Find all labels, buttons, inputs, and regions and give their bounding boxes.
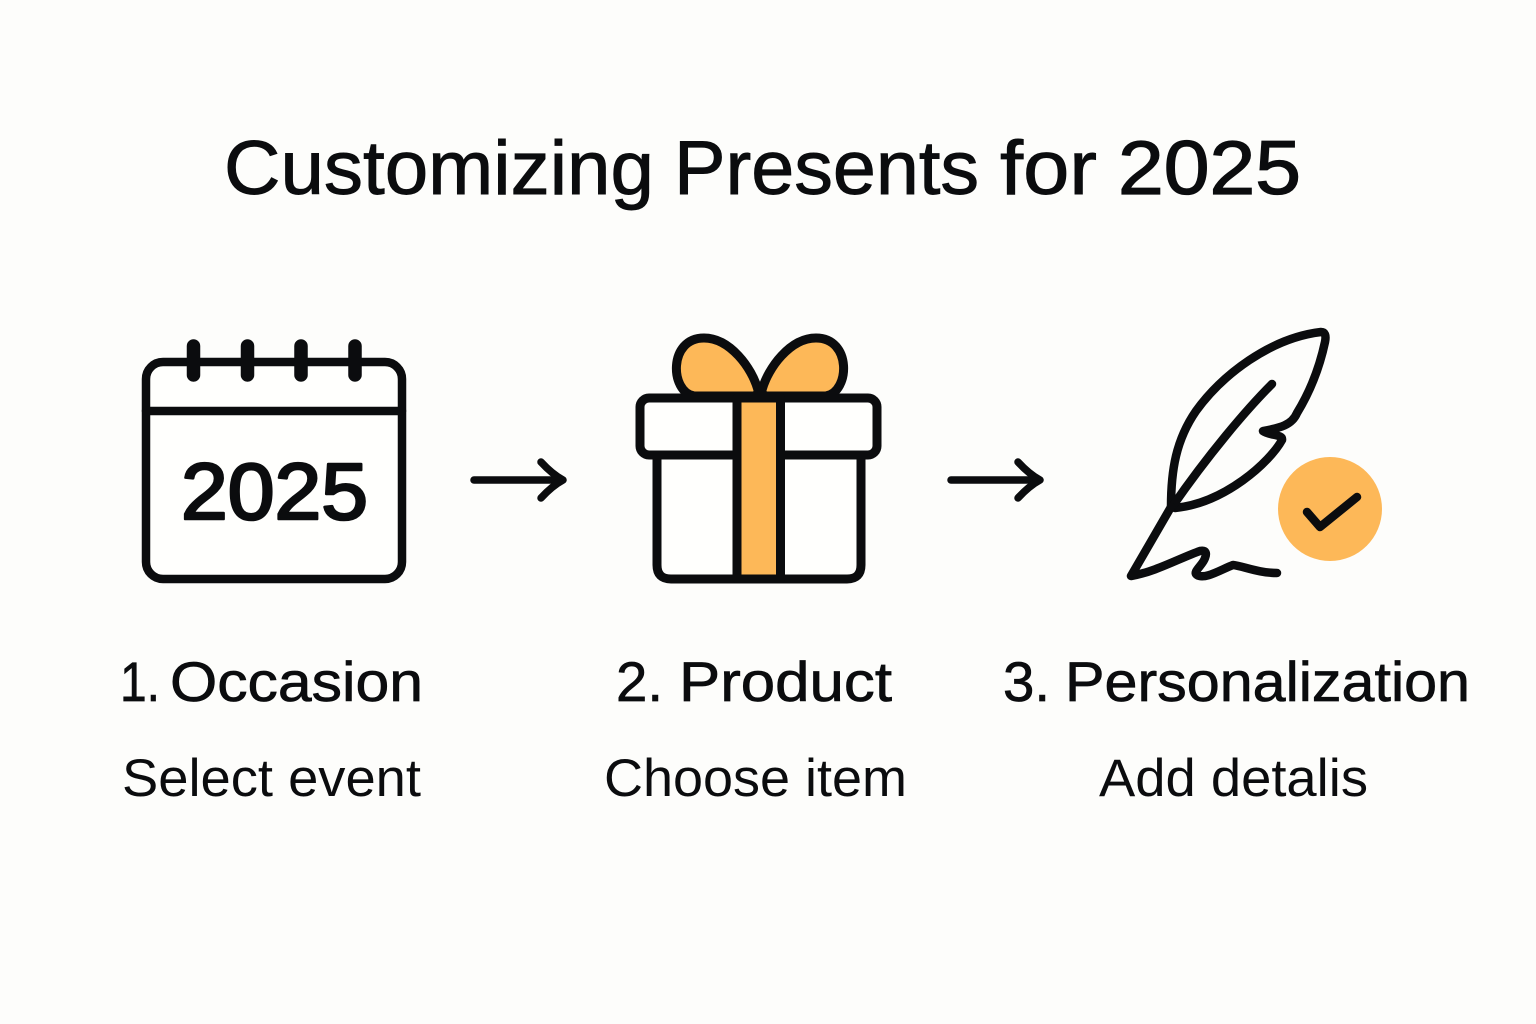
step 1 heading: Occasion	[170, 650, 423, 713]
step 2 heading: 2.	[616, 650, 663, 713]
icon: calendar: 2025	[181, 447, 368, 536]
step 3: personalization	[1003, 332, 1470, 808]
step 2 heading: Product	[679, 650, 892, 713]
step 1 heading: 1.	[120, 650, 160, 713]
title: Presents	[674, 126, 979, 211]
step 3 description: Add detalis	[1099, 749, 1368, 808]
title	[224, 126, 1301, 211]
step 2 description: Choose item	[604, 749, 907, 808]
icon: check badge	[1278, 457, 1382, 561]
step 3 heading: 3.	[1003, 650, 1050, 713]
arrow: occasion to product	[474, 462, 563, 498]
step 1: occasion	[120, 346, 423, 808]
title: for	[1000, 126, 1097, 211]
icon: gift box	[640, 338, 877, 579]
title: Customizing	[224, 126, 654, 211]
icon: feather quill	[1131, 332, 1326, 576]
step 2: product	[604, 338, 907, 808]
arrow: product to personalization	[951, 462, 1040, 498]
title: 2025	[1118, 126, 1301, 211]
step 3 heading: Personalization	[1065, 650, 1470, 713]
step 2 heading	[616, 650, 892, 713]
icon: calendar	[146, 346, 402, 579]
step 1 description: Select event	[122, 749, 421, 808]
